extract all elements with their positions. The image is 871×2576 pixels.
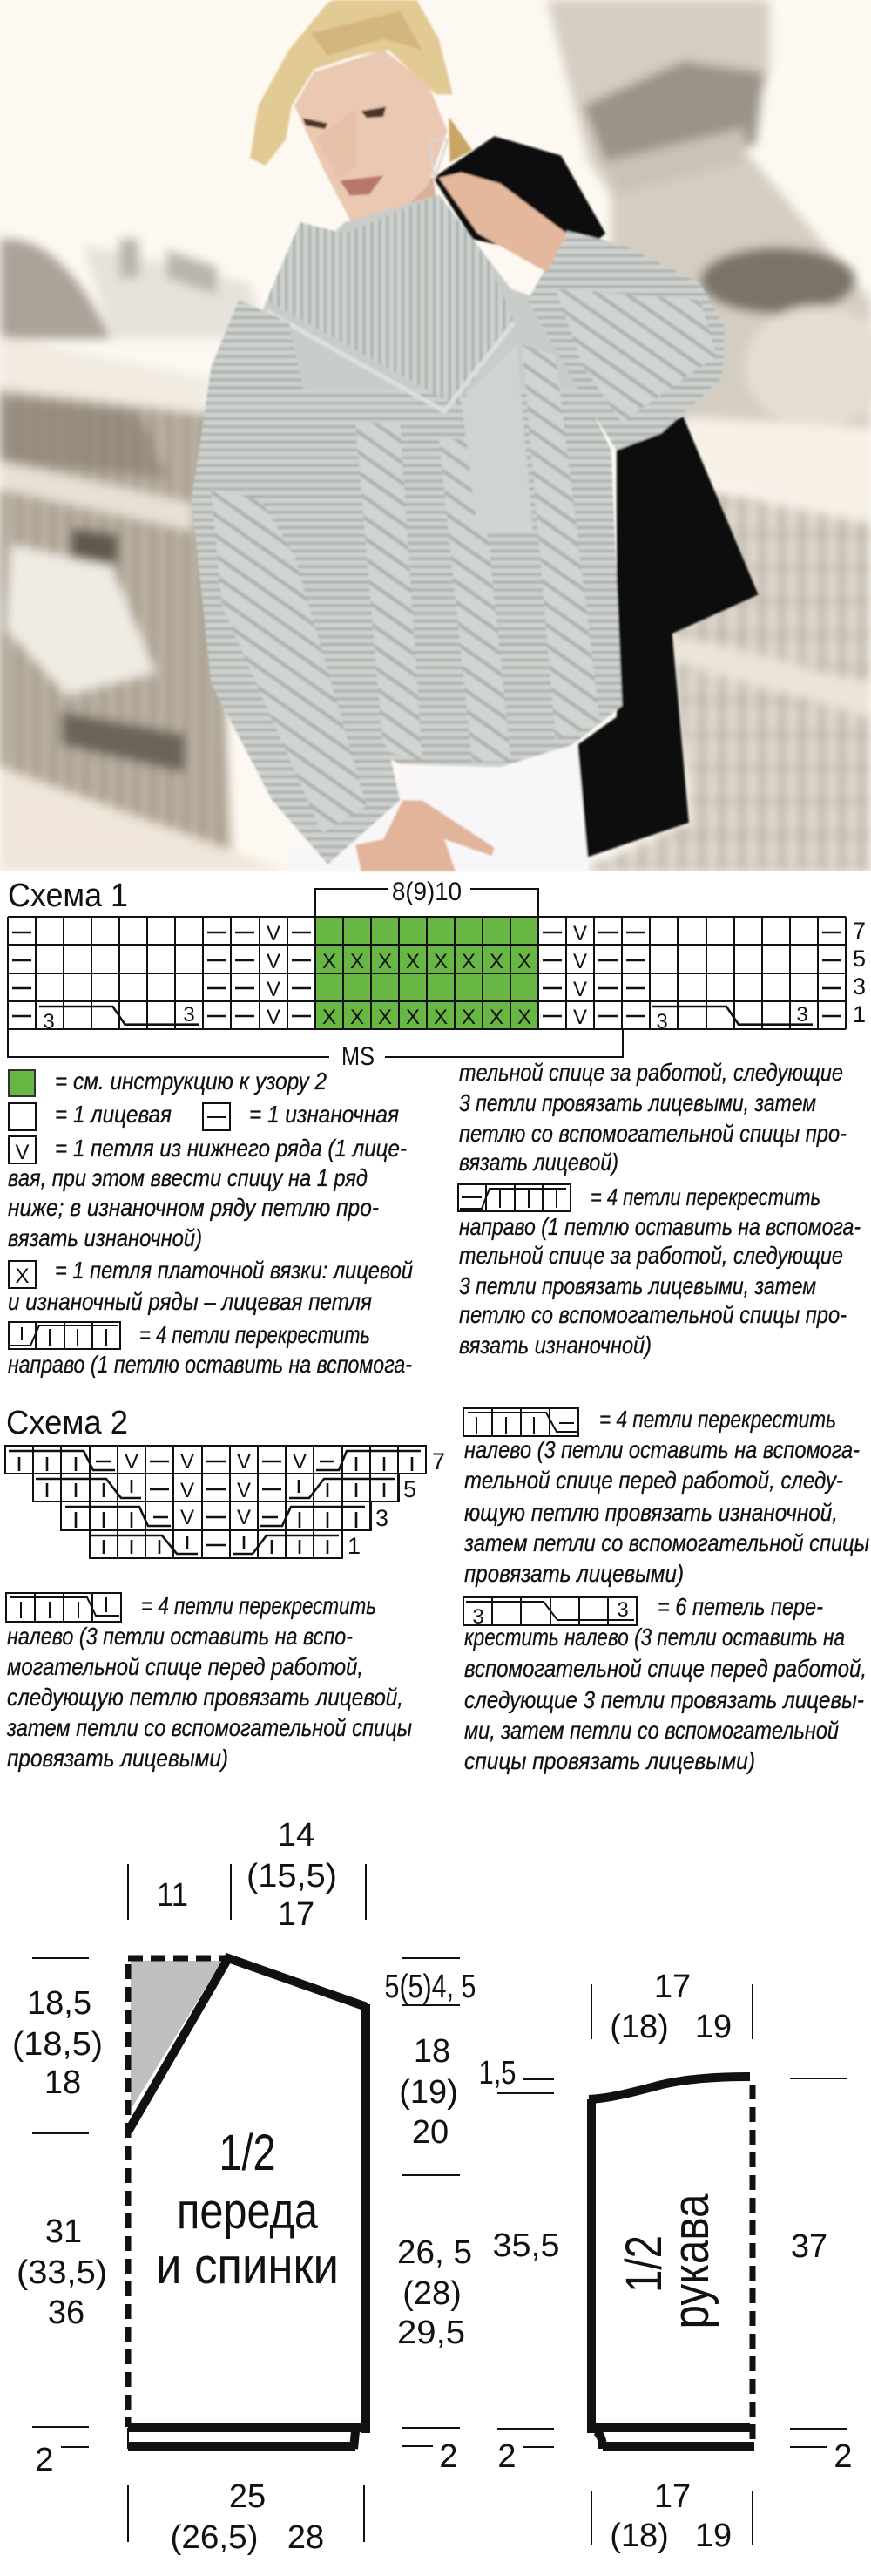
- dimensions: sleeve bottom: 17: [654, 2478, 691, 2515]
- chart: Схема 2 stitch grid: [5, 1446, 445, 1559]
- chart: Схема 2 stitch grid: 3: [375, 1505, 388, 1531]
- chart: Схема 1 stitch grid: 7: [853, 918, 866, 944]
- chart: Схема 1 stitch grid: X: [490, 950, 503, 973]
- icon: 4 stitch cross left purl: [463, 1408, 578, 1436]
- legend: Схема 1 left column: [8, 1068, 413, 1378]
- legend text: X stitch: и изнаночный ряды – лицевая петля: [8, 1288, 372, 1315]
- legend text: V stitch: вая, при этом ввести спицу на 1 ряд: [8, 1164, 368, 1191]
- legend text: cross right with purl: [459, 1183, 861, 1359]
- dimensions: front right: 18: [414, 2033, 450, 2070]
- dimensions: front right: 5(5)4, 5: [385, 1969, 476, 2005]
- sleeve outline: [589, 2077, 754, 2449]
- diagram: front and back pattern: [128, 1958, 370, 2449]
- label: 1/2 переда и спинки: [156, 2125, 339, 2295]
- dimensions: front left: 18,5: [27, 1985, 91, 2022]
- label: 1/2 рукава: [616, 2193, 719, 2329]
- dimensions: front left: (18,5): [12, 2026, 103, 2063]
- dimensions: front right: 20: [412, 2114, 449, 2151]
- icon: 4 stitch cross left knit: [6, 1593, 121, 1622]
- legend text: 6 stitch cross: спицы провязать лицевыми): [464, 1747, 755, 1774]
- legend: Схема 2 left: [6, 1592, 412, 1772]
- dimensions: front bottom: [128, 2478, 364, 2556]
- chart: Схема 1 stitch grid: V: [267, 922, 280, 946]
- chart: Схема 2 stitch grid: V: [293, 1450, 307, 1474]
- dimensions: front left: 31: [45, 2213, 82, 2250]
- chart: Схема 1 stitch grid: V: [573, 922, 587, 946]
- chart: Схема 2 stitch grid: V: [180, 1506, 194, 1529]
- chart: Схема 1 stitch grid: X: [322, 950, 336, 973]
- icon: 6 stitch cross left: [463, 1597, 637, 1629]
- chart: Схема 2 stitch grid: 1: [348, 1533, 361, 1559]
- chart: Схема 1 stitch grid: X: [490, 1006, 503, 1029]
- legend text: cross left knit: могательной спице перед работой,: [7, 1653, 363, 1680]
- chart: Схема 2 stitch grid: V: [180, 1479, 194, 1502]
- chart: Схема 2 stitch grid: V: [180, 1450, 194, 1474]
- dashed sleeve centre: [749, 2085, 756, 2444]
- dimensions: sleeve right: 2: [834, 2438, 853, 2475]
- dimensions: sleeve top: [591, 1969, 753, 2045]
- legend text: purl: = 1 изнаночная: [249, 1101, 399, 1128]
- legend text: cross left purl: провязать лицевыми): [464, 1560, 684, 1587]
- dimensions: sleeve left: 1,5: [479, 2055, 516, 2091]
- icon: 6 stitch cross left: 3: [472, 1605, 484, 1629]
- dimensions: front right: [385, 1958, 476, 2475]
- legend text: cross left knit: [6, 1592, 412, 1772]
- legend text: cross left knit: провязать лицевыми): [7, 1745, 228, 1772]
- dashed center lines: [128, 1958, 228, 2427]
- chart: Схема 1 stitch grid: V: [267, 950, 280, 973]
- bracket: MS: [8, 1029, 623, 1071]
- legend text: V stitch: вязать изнаночной): [8, 1224, 202, 1251]
- legend text: V stitch: = 1 петля из нижнего ряда (1 лице-: [55, 1135, 407, 1162]
- dimensions: front top: 11: [157, 1877, 188, 1914]
- chart: Схема 2 stitch grid: V: [125, 1450, 138, 1474]
- icon: 4 stitch cross right: [9, 1322, 120, 1349]
- chart: Схема 1 stitch grid: 3: [656, 1010, 668, 1034]
- chart: Схема 1 stitch grid: [8, 917, 866, 1034]
- shaded neckline triangle: [131, 1961, 222, 2110]
- diagram: sleeve pattern: [589, 2077, 754, 2449]
- chart: Схема 1 stitch grid: V: [573, 978, 587, 1001]
- chart: Схема 1 stitch grid: X: [350, 950, 364, 973]
- dimensions: sleeve top: (18): [610, 2009, 669, 2045]
- chart: Схема 1 stitch grid: V: [267, 1006, 280, 1029]
- legend: Схема 2 right: [463, 1406, 869, 1774]
- chart: Схема 1 stitch grid: V: [267, 978, 280, 1001]
- dimensions: front left: 36: [48, 2295, 84, 2331]
- legend text: X stitch: [8, 1257, 413, 1315]
- solid outline: [128, 1958, 370, 2449]
- chart: Схема 1 stitch grid: 1: [853, 1001, 866, 1027]
- photo: model wearing cable-knit sweater: [0, 0, 871, 871]
- dimensions: sleeve right: 37: [791, 2228, 827, 2265]
- text: continuation: вязать лицевой): [459, 1149, 618, 1176]
- legend text: 6 stitch cross: = 6 петель пере-: [658, 1593, 823, 1620]
- icon: V stitch: V: [15, 1141, 30, 1164]
- dimensions: sleeve bottom: [591, 2478, 753, 2554]
- dimensions: front right: 26, 5: [397, 2234, 472, 2271]
- dimensions: front right: 29,5: [397, 2315, 465, 2351]
- chart: Схема 2 stitch grid: 7: [432, 1448, 445, 1474]
- label: 1/2 переда и спинки: и спинки: [156, 2238, 339, 2295]
- chart: Схема 1 stitch grid: X: [378, 950, 392, 973]
- chart: Схема 1 stitch grid: X: [462, 950, 476, 973]
- text: continuation: [459, 1059, 847, 1176]
- dimensions: front right: 2: [439, 2438, 458, 2475]
- chart: Схема 1 stitch grid: X: [350, 1006, 364, 1029]
- dimensions: front left: (33,5): [17, 2254, 107, 2291]
- dimensions: front top: 17: [278, 1896, 314, 1933]
- chart: Схема 1 stitch grid: X: [322, 1006, 336, 1029]
- chart: Схема 1 stitch grid: V: [573, 1006, 587, 1029]
- chart: Схема 1 stitch grid: X: [378, 1006, 392, 1029]
- bracket: 8(9)10 repeat: [315, 878, 538, 917]
- dimensions: sleeve bottom: 19: [695, 2518, 732, 2554]
- chart: Схема 1 stitch grid: X: [517, 1006, 531, 1029]
- chart: Схема 2 stitch grid: 5: [403, 1476, 416, 1502]
- chart: Схема 1 stitch grid: X: [406, 950, 420, 973]
- legend text: cross right purl-less: [8, 1321, 412, 1378]
- icon: knit stitch: [9, 1103, 36, 1130]
- heading: Схема 1: Схема 1: [8, 878, 128, 914]
- legend text: knit: = 1 лицевая: [55, 1101, 172, 1128]
- legend text: V stitch: [8, 1135, 407, 1251]
- heading: Схема 2: Схема 2: [6, 1405, 128, 1441]
- dimensions: sleeve left: 35,5: [493, 2227, 559, 2264]
- icon: 4 stitch cross right with purl: [458, 1184, 571, 1211]
- dimensions: front top: 14: [278, 1817, 314, 1854]
- dimensions: sleeve top: 19: [695, 2009, 732, 2045]
- legend text: V stitch: ниже; в изнаночном ряду петлю про-: [8, 1194, 379, 1221]
- chart: Схема 2 stitch grid: V: [237, 1506, 251, 1529]
- dimensions: front left: [12, 1958, 107, 2478]
- chart: Схема 1 stitch grid: X: [462, 1006, 476, 1029]
- legend text: 6 stitch cross: [464, 1593, 867, 1774]
- legend text: cross left purl: [463, 1406, 869, 1587]
- dimensions: front left: 18: [44, 2064, 81, 2101]
- dimensions: sleeve left: [479, 2055, 559, 2475]
- chart: Схема 1 stitch grid: X: [434, 950, 448, 973]
- chart: Схема 1 stitch grid: X: [434, 1006, 448, 1029]
- legend text: cross left knit: = 4 петли перекрестить: [141, 1592, 376, 1619]
- legend text: green: = см. инструкцию к узору 2: [55, 1068, 327, 1095]
- dimensions: front left: 2: [35, 2442, 54, 2478]
- dimensions: sleeve left: 2: [497, 2438, 517, 2475]
- icon: green square: [9, 1070, 35, 1096]
- dimensions: sleeve right: [790, 2078, 853, 2475]
- legend text: cross left knit: налево (3 петли оставить на вспо-: [7, 1623, 353, 1650]
- chart: Схема 1 stitch grid: V: [573, 950, 587, 973]
- label: 1/2 переда и спинки: переда: [177, 2183, 319, 2240]
- dimensions: front right: (19): [399, 2074, 458, 2111]
- label: 1/2 рукава: 1/2: [616, 2235, 672, 2293]
- chart: Схема 1 stitch grid: 3: [796, 1003, 808, 1027]
- bracket: MS: MS: [341, 1042, 375, 1071]
- dimensions: front bottom: (26,5): [171, 2519, 258, 2556]
- chart: Схема 1 stitch grid: 5: [853, 946, 866, 972]
- label: 1/2 рукава: рукава: [663, 2193, 719, 2329]
- chart: Схема 1 stitch grid: 3: [853, 973, 866, 1000]
- dimensions: sleeve top: 17: [654, 1969, 691, 2005]
- icon: X stitch: X: [15, 1264, 30, 1288]
- legend text: cross left knit: затем петли со вспомогательной спицы: [6, 1714, 412, 1741]
- dimensions: front bottom: 28: [287, 2519, 324, 2556]
- legend text: X stitch: = 1 петля платочной вязки: лицевой: [55, 1257, 413, 1284]
- dimensions: front top: [128, 1817, 366, 1933]
- chart: Схема 1 stitch grid: 3: [183, 1003, 195, 1027]
- legend text: cross left knit: следующую петлю провязать лицевой,: [7, 1684, 403, 1711]
- dimensions: sleeve bottom: (18): [610, 2518, 669, 2554]
- legend: Схема 1 right column: [458, 1059, 861, 1359]
- dimensions: front bottom: 25: [229, 2478, 266, 2515]
- icon: purl stitch: [203, 1103, 230, 1130]
- bracket: 8(9)10 repeat: 8(9)10: [392, 878, 462, 906]
- chart: Схема 1 stitch grid: 3: [43, 1010, 55, 1034]
- chart: Схема 2 stitch grid: V: [237, 1479, 251, 1502]
- dimensions: front top: (15,5): [246, 1858, 337, 1895]
- chart: Схема 2 stitch grid: V: [237, 1450, 251, 1474]
- chart: Схема 1 stitch grid: X: [406, 1006, 420, 1029]
- legend text: cross right purl-less: направо (1 петлю оставить на вспомога-: [8, 1351, 412, 1378]
- icon: X stitch: [9, 1261, 36, 1288]
- icon: 6 stitch cross left: 3: [617, 1598, 629, 1622]
- label: 1/2 переда и спинки: 1/2: [219, 2125, 275, 2181]
- dimensions: front right: (28): [402, 2275, 462, 2312]
- chart: Схема 1 stitch grid: X: [517, 950, 531, 973]
- legend text: cross right with purl: вязать изнаночной): [459, 1332, 652, 1359]
- legend text: cross right purl-less: = 4 петли перекрестить: [139, 1321, 370, 1348]
- icon: V stitch: [9, 1136, 36, 1164]
